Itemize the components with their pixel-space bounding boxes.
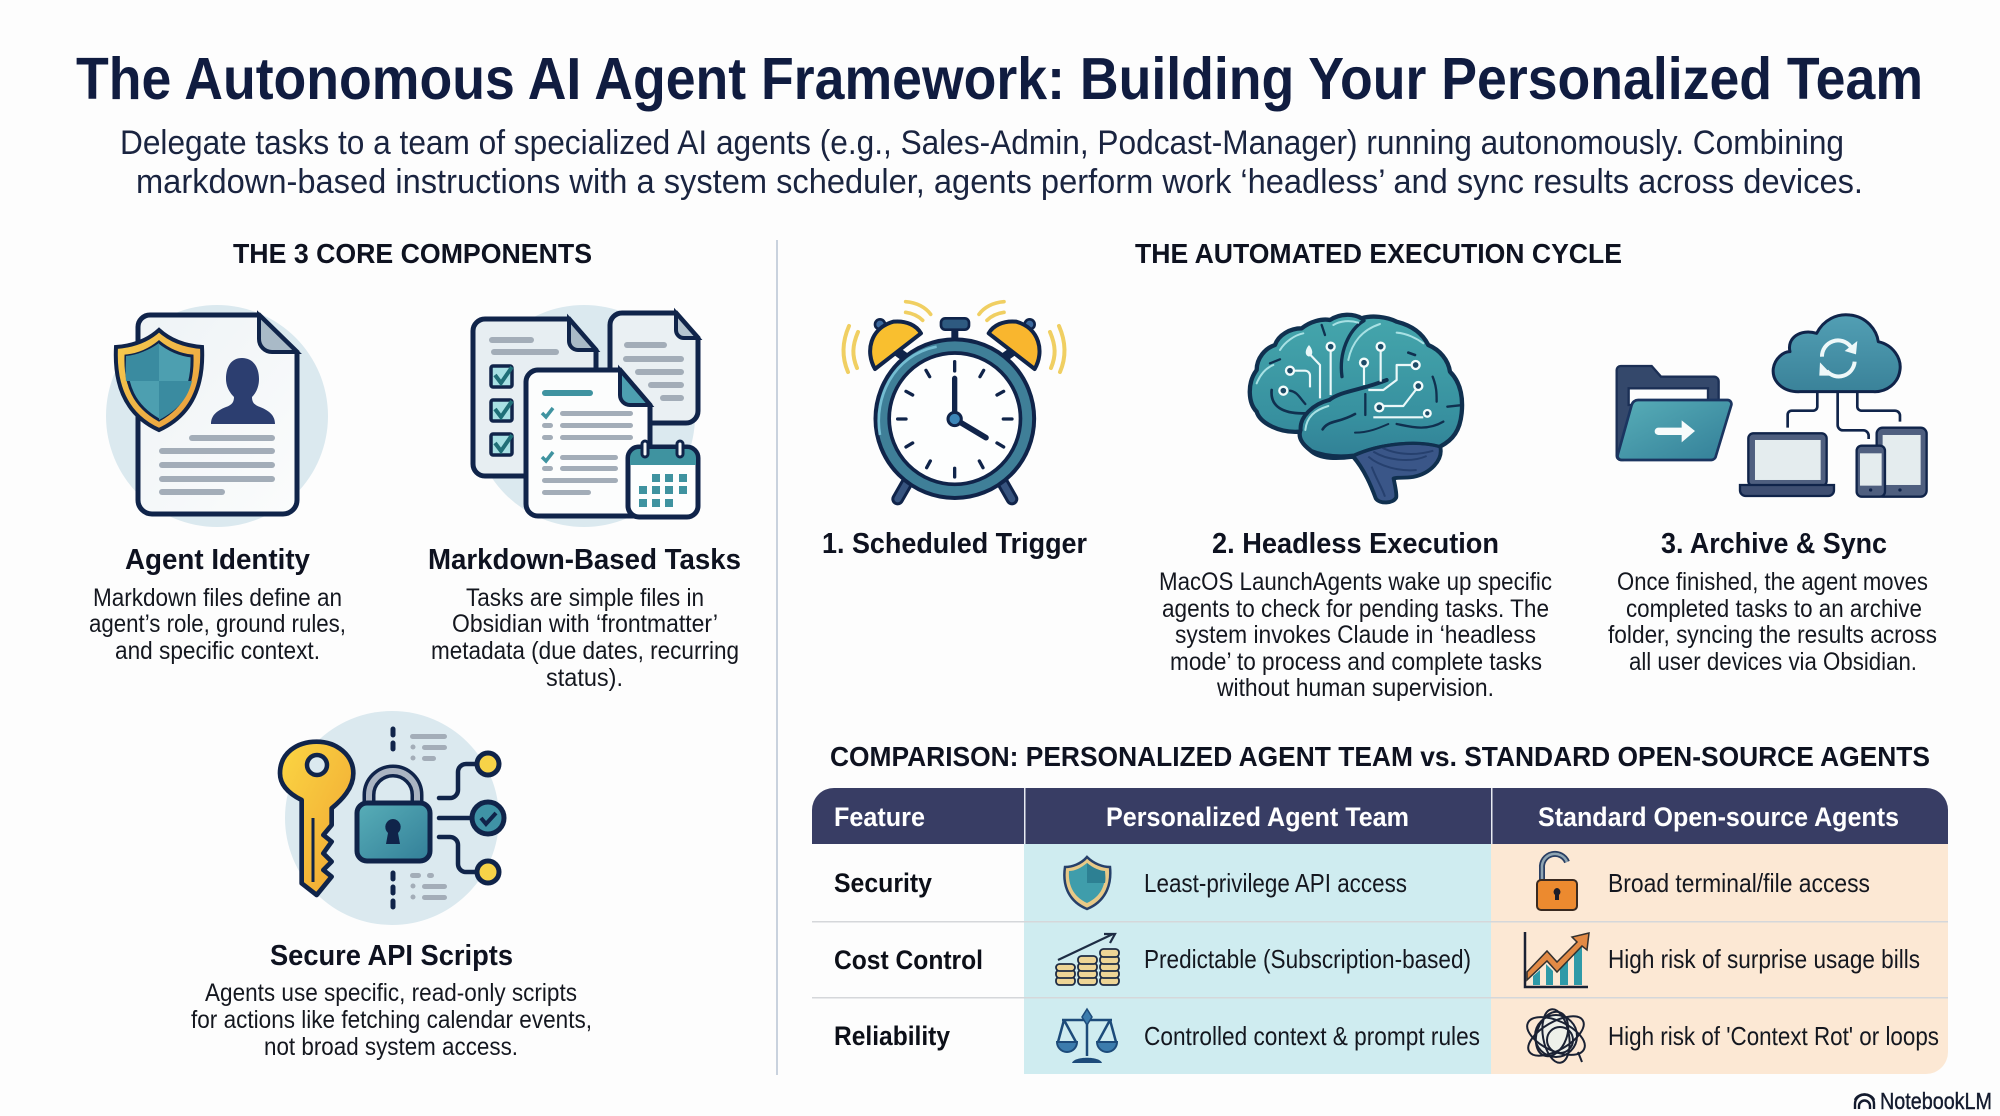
row: security — [834, 854, 1870, 910]
text: headless execution description: without human supervision. — [1216, 674, 1494, 702]
icon: open padlock — [1537, 854, 1577, 910]
label: scheduled trigger: 1. Scheduled Trigger — [822, 528, 1087, 560]
row: security: Least-privilege API access — [1144, 868, 1407, 898]
icon: rising cost chart — [1525, 932, 1589, 987]
subtitle: markdown-based instructions with a system scheduler, agents perform work ‘headless’ and sync results across devices. — [136, 163, 1863, 201]
label: markdown tasks: Markdown-Based Tasks — [428, 544, 741, 576]
label: secure api scripts: Secure API Scripts — [270, 940, 513, 972]
row: cost control — [834, 932, 1920, 987]
text: markdown tasks description: status). — [546, 664, 623, 692]
icon: alarm clock — [844, 302, 1064, 499]
icon: tangled loops — [1522, 1007, 1590, 1065]
row: reliability — [834, 1007, 1939, 1065]
text: archive and sync description: completed tasks to an archive — [1626, 595, 1922, 623]
label: archive and sync: 3. Archive & Sync — [1661, 528, 1887, 560]
icon: folder, cloud and devices — [1617, 315, 1927, 497]
text: headless execution description: agents to check for pending tasks. The — [1162, 595, 1549, 623]
icon: identity document with shield — [106, 305, 328, 527]
text: archive and sync description — [1608, 568, 1937, 676]
text: archive and sync description: folder, syncing the results across — [1608, 621, 1937, 649]
text: agent identity description: and specific context. — [115, 637, 320, 665]
icon: brain with circuits — [1250, 315, 1462, 502]
heading: comparison: COMPARISON: PERSONALIZED AGENT TEAM vs. STANDARD OPEN-SOURCE AGENTS — [830, 741, 1930, 772]
icon: key, padlock and connections — [280, 711, 504, 925]
subtitle: Delegate tasks to a team of specialized AI agents (e.g., Sales-Admin, Podcast-Manager) running autonomously. Combining — [120, 124, 1844, 162]
panel: agent identity — [89, 305, 346, 665]
text: markdown tasks description: Tasks are simple files in — [466, 584, 704, 612]
text: archive and sync description: all user devices via Obsidian. — [1629, 648, 1917, 676]
table header labels: Feature — [834, 802, 925, 832]
text: headless execution description — [1159, 568, 1552, 702]
text: secure api description: not broad system access. — [264, 1033, 518, 1061]
row: reliability: High risk of 'Context Rot' or loops — [1608, 1021, 1939, 1051]
heading: execution cycle: THE AUTOMATED EXECUTION CYCLE — [1135, 238, 1622, 269]
row: reliability: Controlled context & prompt rules — [1144, 1021, 1480, 1051]
row: cost control: Cost Control — [834, 945, 983, 975]
panel: markdown tasks — [428, 305, 741, 692]
text: secure api description — [191, 979, 592, 1061]
text: markdown tasks description: metadata (due dates, recurring — [431, 637, 739, 665]
text: agent identity description: Markdown files define an — [93, 584, 342, 612]
label: agent identity: Agent Identity — [125, 544, 310, 576]
comparison table — [812, 788, 1948, 1074]
heading: core components: THE 3 CORE COMPONENTS — [233, 238, 592, 269]
row: security: Broad terminal/file access — [1608, 868, 1870, 898]
table header labels: Standard Open-source Agents — [1538, 802, 1899, 832]
text: headless execution description: MacOS LaunchAgents wake up specific — [1159, 568, 1552, 596]
row: reliability: Reliability — [834, 1021, 950, 1051]
icon: task documents and calendar — [473, 305, 698, 527]
panel: archive and sync — [1608, 315, 1937, 676]
text: archive and sync description: Once finished, the agent moves — [1617, 568, 1928, 596]
subtitle — [120, 124, 1863, 201]
table header labels: Personalized Agent Team — [1106, 802, 1409, 832]
row: cost control: Predictable (Subscription-based) — [1144, 944, 1471, 974]
text: markdown tasks description — [431, 584, 739, 692]
text: agent identity description: agent’s role, ground rules, — [89, 610, 346, 638]
panel: secure api scripts — [191, 711, 592, 1061]
icon: shield — [1064, 857, 1110, 909]
text: headless execution description: system invokes Claude in ‘headless — [1175, 621, 1536, 649]
text: agent identity description — [89, 584, 346, 665]
row: security: Security — [834, 868, 932, 898]
text: markdown tasks description: Obsidian with ‘frontmatter’ — [452, 610, 718, 638]
row: cost control: High risk of surprise usage bills — [1608, 944, 1920, 974]
table header labels — [834, 802, 1899, 832]
icon: balance scales — [1057, 1009, 1117, 1063]
panel: headless execution — [1159, 315, 1552, 702]
text: secure api description: Agents use specific, read-only scripts — [205, 979, 577, 1007]
label: headless execution: 2. Headless Execution — [1212, 528, 1499, 560]
icon: coin stacks — [1056, 934, 1119, 985]
text: headless execution description: mode’ to process and complete tasks — [1170, 648, 1542, 676]
text: secure api description: for actions like fetching calendar events, — [191, 1006, 592, 1034]
panel: scheduled trigger — [822, 302, 1087, 560]
